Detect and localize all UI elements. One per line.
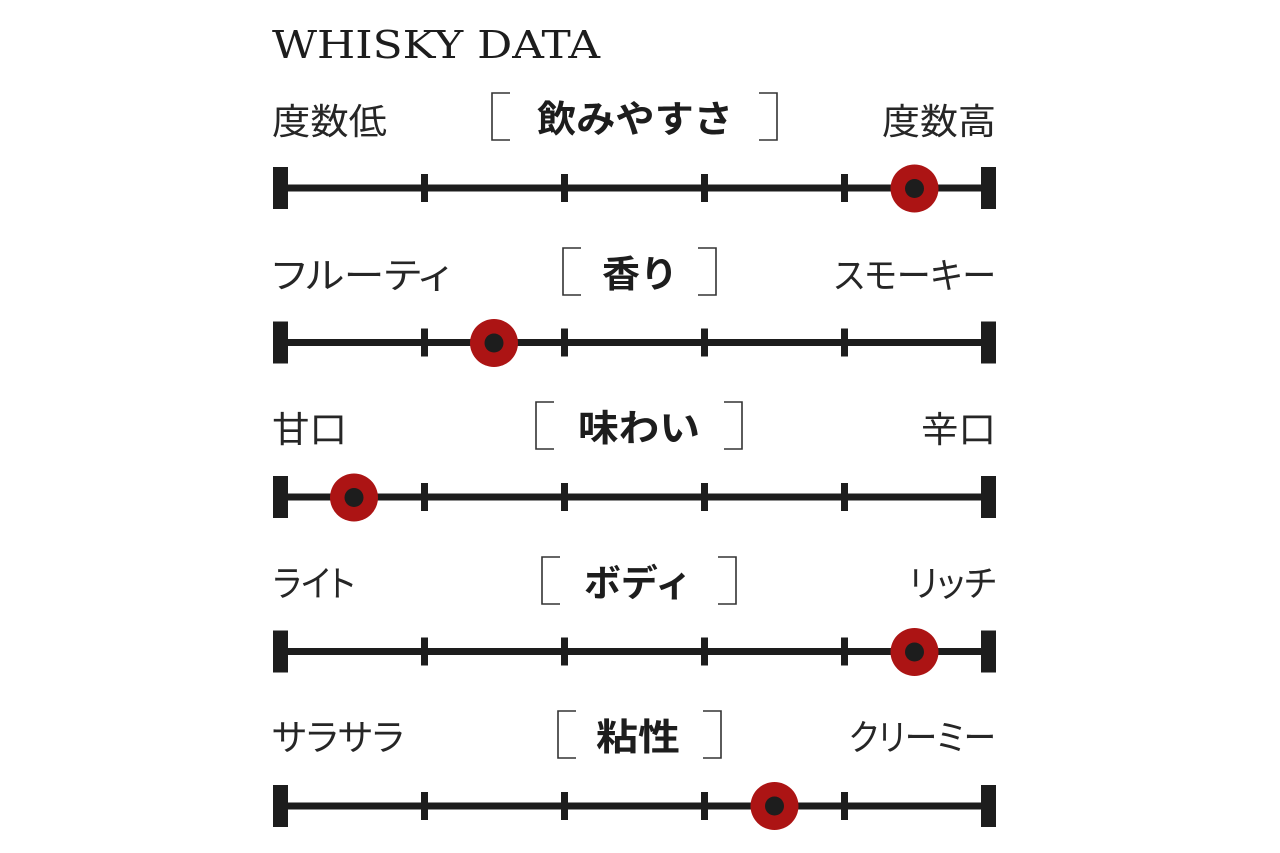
heading: aroma — [563, 248, 716, 295]
right label: high alcohol: 度数高 — [882, 101, 996, 142]
right label: smoky: スモーキー — [834, 255, 996, 296]
title: WHISKY DATA — [272, 23, 601, 67]
left label: low alcohol: 度数低 — [272, 101, 387, 142]
left label: light: ライト — [273, 563, 355, 604]
marker — [470, 319, 518, 367]
heading: taste: 味わい — [578, 408, 700, 449]
scale bar — [273, 785, 996, 827]
heading: viscosity: 粘性 — [596, 717, 680, 758]
panel: drinkability scale — [272, 93, 996, 212]
marker — [890, 628, 938, 676]
scale bar — [273, 167, 996, 209]
heading: drinkability: 飲みやすさ — [537, 99, 733, 140]
scale bar — [273, 322, 996, 364]
heading: body: ボディ — [584, 562, 692, 604]
marker — [890, 164, 938, 212]
heading: taste — [536, 402, 742, 449]
heading: drinkability — [492, 93, 777, 140]
left label: smooth: サラサラ — [272, 717, 404, 758]
right label: creamy: クリーミー — [849, 717, 996, 758]
heading: aroma: 香り — [602, 254, 678, 295]
scale bar — [273, 630, 996, 672]
scale bar — [273, 476, 996, 518]
heading: body — [542, 557, 736, 604]
heading: viscosity — [558, 711, 721, 758]
panel: taste scale — [272, 402, 996, 522]
left label: sweet: 甘口 — [272, 409, 347, 450]
right label: dry: 辛口 — [921, 409, 996, 450]
marker — [750, 782, 798, 830]
panel: viscosity scale — [272, 711, 996, 830]
marker — [330, 474, 378, 522]
panel: body scale — [273, 557, 996, 676]
left label: fruity: フルーティ — [272, 255, 450, 296]
right label: rich: リッチ — [909, 563, 996, 604]
panel: aroma scale — [272, 248, 996, 367]
